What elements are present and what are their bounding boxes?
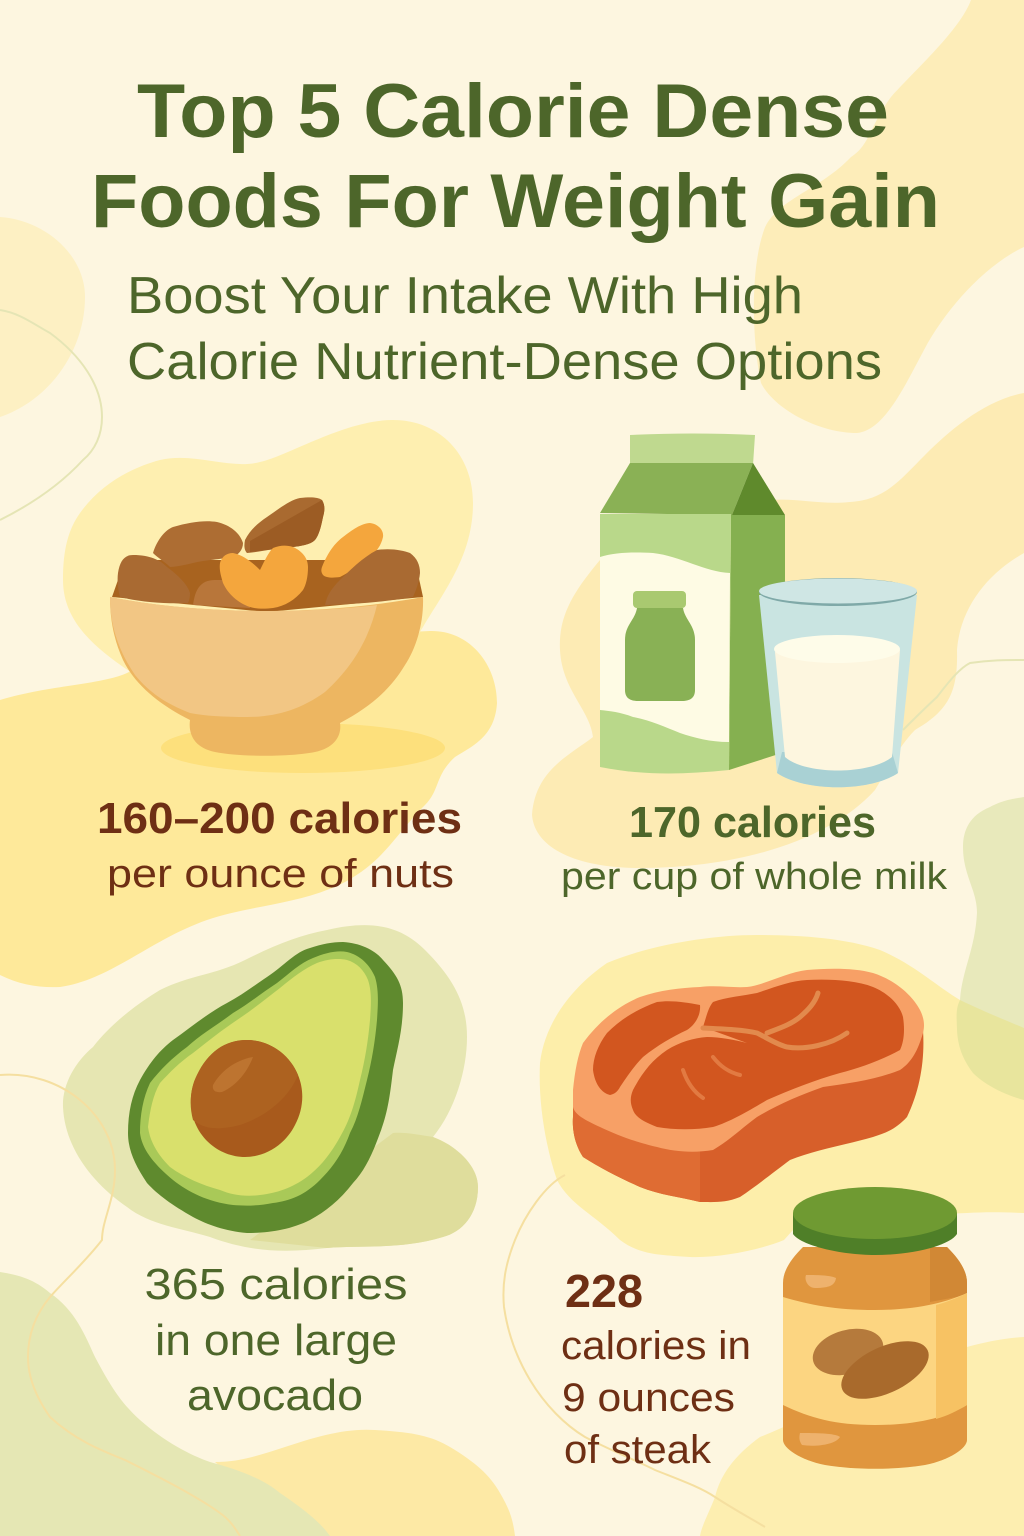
subtitle: Boost Your Intake With High <box>127 267 803 325</box>
avocado calories text: avocado <box>187 1371 363 1420</box>
milk calories text: 170 calories <box>629 798 876 847</box>
icon: avocado <box>128 942 403 1233</box>
panel: whole milk <box>561 434 948 898</box>
title: Top 5 Calorie Dense <box>137 69 889 154</box>
panel: avocado <box>128 942 408 1420</box>
title <box>91 69 940 244</box>
steak calories text: 9 ounces <box>562 1376 735 1420</box>
icon: bowl of nuts <box>110 497 445 773</box>
milk calories text: per cup of whole milk <box>561 856 948 898</box>
title: Foods For Weight Gain <box>91 159 940 244</box>
icon: peanut butter jar <box>783 1187 967 1469</box>
avocado calories text <box>144 1260 408 1420</box>
steak calories text: calories in <box>561 1324 751 1368</box>
steak calories text: 228 <box>565 1265 643 1317</box>
steak calories text: of steak <box>564 1428 712 1472</box>
nuts calories text: per ounce of nuts <box>107 852 454 896</box>
panel: steak and peanut butter <box>561 969 967 1472</box>
icon: steak <box>573 969 924 1202</box>
subtitle <box>127 267 882 391</box>
nuts calories text: 160–200 calories <box>97 794 462 843</box>
avocado calories text: 365 calories <box>144 1260 408 1309</box>
icon: milk carton <box>600 434 785 773</box>
icon: glass of milk <box>759 578 917 787</box>
subtitle: Calorie Nutrient-Dense Options <box>127 333 882 391</box>
avocado calories text: in one large <box>155 1316 397 1365</box>
steak calories text <box>561 1265 751 1472</box>
milk calories text <box>561 798 948 898</box>
nuts calories text <box>97 794 462 896</box>
panel: nuts <box>97 497 462 896</box>
